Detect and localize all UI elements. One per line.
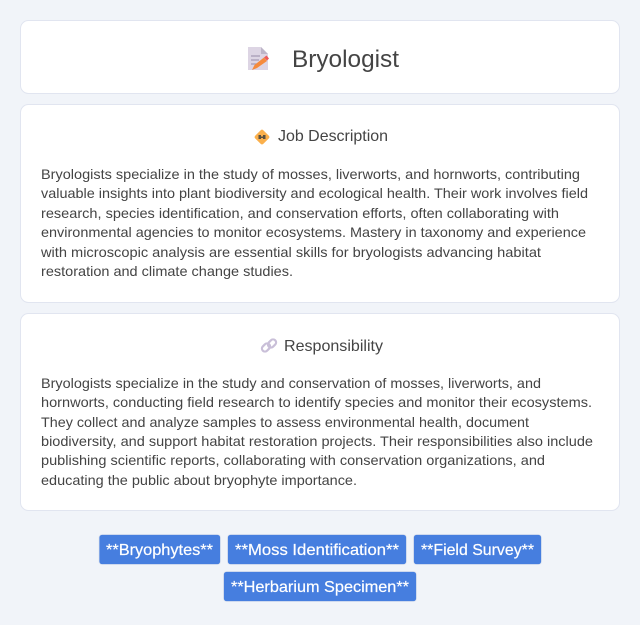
text block: responsibility: hornworts, conducting field research to identify species and monitor their ecosystems. (41, 394, 592, 410)
tag: Herbarium Specimen (224, 572, 416, 602)
tag: Moss Identification: **Moss Identification** (235, 542, 399, 559)
tag: Bryophytes: **Bryophytes** (106, 542, 213, 559)
text block: job description: valuable insights into plant biodiversity and ecological health. Their work involves field (41, 185, 588, 201)
heading: responsibility: Responsibility (284, 338, 383, 355)
text block: job description: restoration and climate change studies. (41, 263, 293, 279)
text block: job description: research, species identification, and conservation efforts, often collaborating with (41, 205, 559, 221)
text block: responsibility: They collect and analyze samples to assess environmental health, document (41, 414, 529, 430)
tag: Field Survey: **Field Survey** (421, 542, 534, 559)
text block: job description: with microscopic analysis are essential skills for bryologists advancing habitat (40, 244, 541, 260)
text block: responsibility: educating the public about bryophyte importance. (41, 472, 357, 488)
text block: responsibility: publishing scientific reports, collaborating with conservation organizations, and (41, 452, 545, 468)
tag: Field Survey (414, 534, 542, 564)
panel: responsibility (20, 314, 620, 510)
text block: responsibility: Bryologists specialize in the study and conservation of mosses, liverworts, and (41, 375, 541, 391)
text block: job description: environmental agencies to monitor ecosystems. Mastery in taxonomy and experience (41, 224, 586, 240)
tag: Bryophytes (99, 534, 220, 564)
heading: job description: Job Description (278, 128, 388, 145)
tag: Moss Identification (228, 534, 406, 564)
panel: job description (20, 104, 620, 302)
icon: chain link (261, 338, 277, 353)
icon: document with pencil (248, 47, 269, 70)
text block: responsibility: biodiversity, and support habitat restoration projects. Their responsibilities also include (41, 433, 593, 449)
title: Bryologist (292, 46, 399, 73)
text block: responsibility (41, 375, 593, 488)
icon: orange diamond (254, 129, 270, 145)
text block: job description (40, 166, 588, 279)
tag: Herbarium Specimen: **Herbarium Specimen** (231, 579, 409, 596)
text block: job description: Bryologists specialize in the study of mosses, liverworts, and hornworts, contributing (41, 166, 580, 182)
panel: title card (20, 20, 620, 94)
